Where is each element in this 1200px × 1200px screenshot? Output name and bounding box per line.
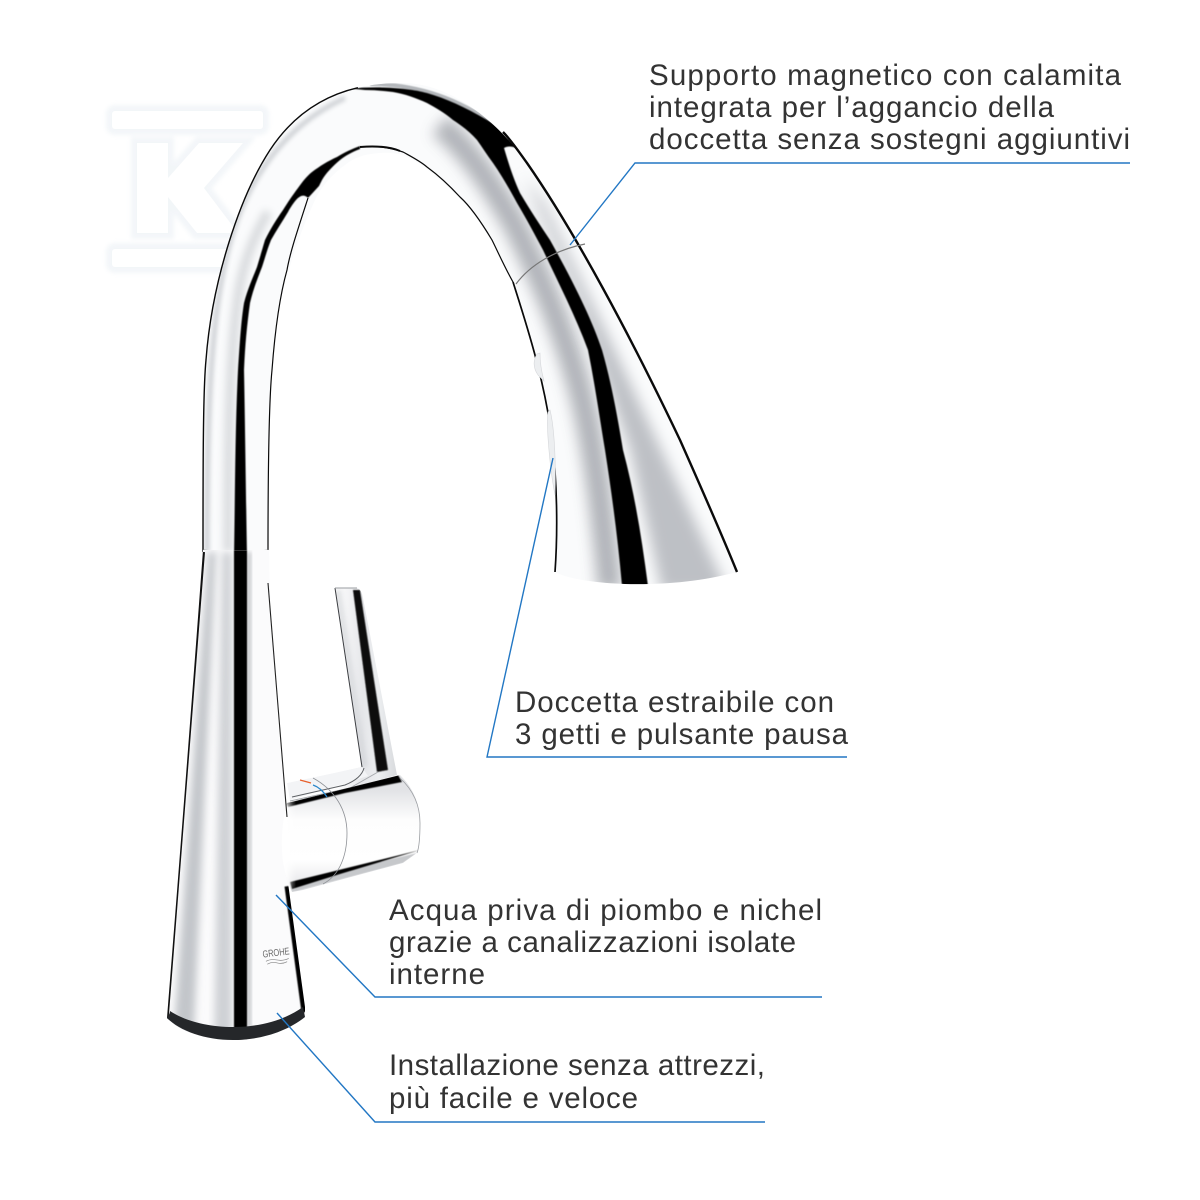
callout 4 text: più facile e veloce xyxy=(389,1082,638,1115)
handle lever xyxy=(287,588,397,802)
callout 2 text: Doccetta estraibile con xyxy=(515,686,834,719)
spray head buttons xyxy=(534,353,555,495)
callout 3: lead-free water xyxy=(276,894,822,997)
callout 4: tool-free installation xyxy=(277,1013,765,1122)
callout 3 text: interne xyxy=(389,958,485,991)
callout 4 text: Installazione senza attrezzi, xyxy=(389,1049,765,1082)
callout 1 text: Supporto magnetico con calamita xyxy=(649,59,1122,92)
spout and pull-out spray head xyxy=(190,70,750,600)
black base ring xyxy=(167,1007,305,1040)
callout 2 text xyxy=(515,686,849,751)
head black reflection band xyxy=(350,87,648,586)
edge lines xyxy=(203,88,737,572)
leader line 2 xyxy=(487,458,847,757)
faucet xyxy=(160,70,750,1045)
watermark logo xyxy=(112,111,263,267)
leader line 4 xyxy=(277,1013,765,1122)
body right edge xyxy=(268,583,287,817)
callout 1: magnetic holder xyxy=(570,59,1130,245)
GROHE logo xyxy=(262,946,291,966)
GROHE logo: GROHE xyxy=(262,946,290,961)
temperature ring with red and blue marks xyxy=(300,778,347,884)
callout 3 text xyxy=(389,894,822,991)
callout 4 text xyxy=(389,1049,765,1115)
mixer cylinder xyxy=(268,583,425,900)
leader line 3 xyxy=(276,895,822,997)
callout 2 text: 3 getti e pulsante pausa xyxy=(515,718,849,751)
leader line 1 xyxy=(570,163,1130,245)
callout 3 text: grazie a canalizzazioni isolate xyxy=(389,926,796,959)
callout 3 text: Acqua priva di piombo e nichel xyxy=(389,894,822,927)
spout collar seams xyxy=(516,244,585,284)
stem black reflection band xyxy=(234,146,360,556)
callout 1 text xyxy=(649,59,1130,156)
faucet body xyxy=(160,545,310,1045)
callout 1 text: integrata per l’aggancio della xyxy=(649,91,1055,124)
callout 1 text: doccetta senza sostegni aggiuntivi xyxy=(649,123,1130,156)
callout 2: pull-out spray xyxy=(487,458,849,757)
